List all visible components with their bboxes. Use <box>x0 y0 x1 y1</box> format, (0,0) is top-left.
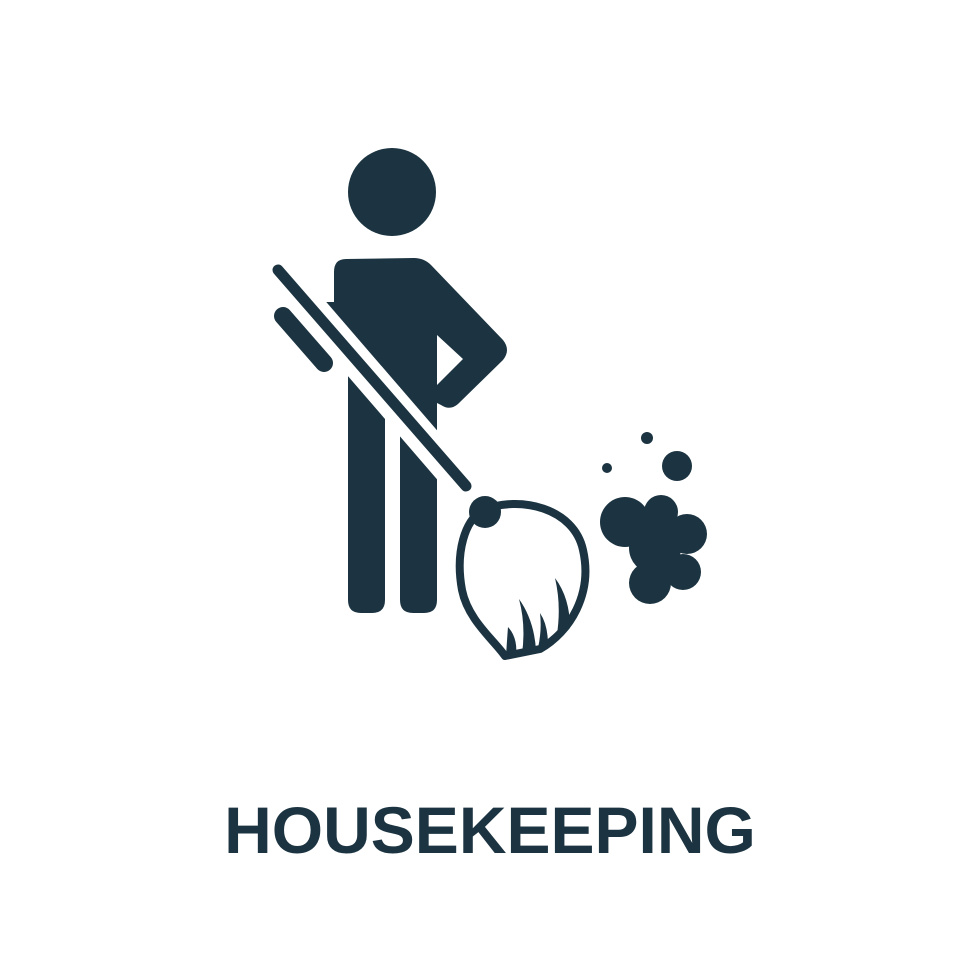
icon: hand left <box>283 316 324 363</box>
icon: dust cloud <box>600 432 707 604</box>
icon: head <box>348 148 436 236</box>
icon: body <box>318 258 507 613</box>
icon: broom head <box>460 496 585 656</box>
icon: broom handle <box>262 252 476 500</box>
title: HOUSEKEEPING <box>224 793 756 867</box>
